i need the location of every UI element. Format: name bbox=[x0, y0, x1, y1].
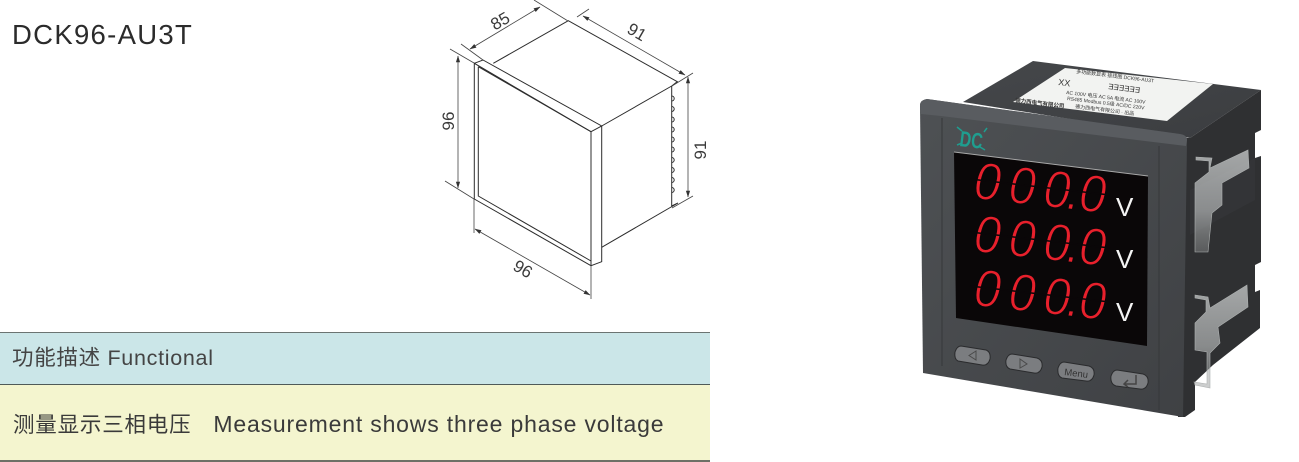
title: DCK96-AU3T bbox=[12, 19, 193, 50]
reading row 3: 000.0 bbox=[969, 258, 1113, 331]
button: menu bbox=[1058, 362, 1094, 381]
button: left bbox=[955, 346, 990, 365]
dimension lines bbox=[445, 0, 693, 299]
unit labels: V bbox=[1116, 297, 1134, 327]
dimension labels: 91 bbox=[624, 19, 650, 45]
readings bbox=[969, 151, 1113, 331]
heading: functional: 功能描述 Functional bbox=[12, 346, 214, 370]
panel: function description bbox=[0, 385, 710, 462]
meter display screen bbox=[954, 152, 1148, 346]
button: enter bbox=[1111, 370, 1148, 389]
meter label sticker: 德力西电气有限公司 bbox=[1015, 96, 1065, 110]
meter label sticker: XX bbox=[1058, 77, 1071, 88]
brand logo: DC bbox=[958, 128, 984, 154]
mounting clip: upper bbox=[1195, 150, 1249, 252]
meter label sticker: AC 100V 电压 AC 5A 电流 AC 100V bbox=[1066, 89, 1146, 106]
reading row 1: 000.0 bbox=[969, 151, 1113, 224]
device outline bbox=[474, 21, 678, 266]
dimension labels: 91 bbox=[691, 141, 710, 159]
button: right bbox=[1006, 354, 1042, 373]
dimension labels: 85 bbox=[487, 8, 513, 34]
button: menu: Menu bbox=[1064, 367, 1089, 381]
dimension labels bbox=[439, 8, 710, 282]
meter label sticker: ƎƎƎƎƎƎ bbox=[1108, 82, 1141, 95]
meter label sticker: RS485 Modbus 0.5级 AC/DC 220V bbox=[1067, 95, 1146, 112]
meter label sticker: 多功能数显表 接线图 DCK96-AU3T bbox=[1076, 68, 1154, 85]
mounting clip: lower bbox=[1194, 285, 1248, 388]
dimension labels: 96 bbox=[510, 256, 536, 282]
unit labels: V bbox=[1116, 244, 1134, 274]
dimension labels: 96 bbox=[439, 112, 458, 130]
meter front bezel bbox=[920, 99, 1187, 417]
panel: functional header bbox=[0, 332, 710, 385]
reading row 2: 000.0 bbox=[969, 204, 1113, 277]
meter label sticker: 德力西电气有限公司 · 出品 bbox=[1075, 103, 1135, 117]
meter rear body bbox=[963, 61, 1261, 417]
text: description: 测量显示三相电压 Measurement shows three phase voltage bbox=[13, 411, 664, 437]
unit labels bbox=[1116, 192, 1134, 327]
meter label sticker bbox=[1013, 68, 1213, 121]
unit labels: V bbox=[1116, 192, 1134, 222]
